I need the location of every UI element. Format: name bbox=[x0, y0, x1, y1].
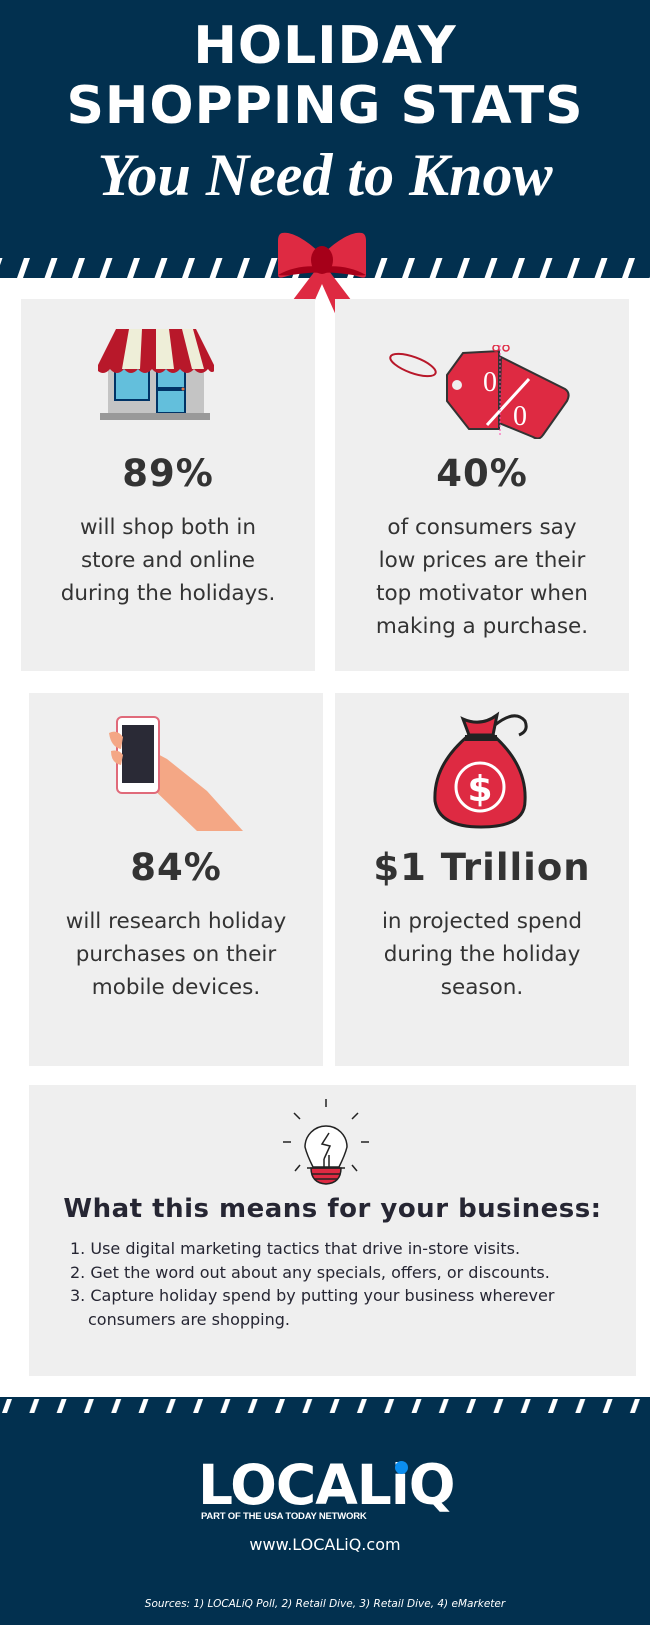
tagline: PART OF THE USA TODAY NETWORK bbox=[201, 1511, 367, 1522]
icon: phone in hand bbox=[109, 716, 243, 831]
text: in projected spend bbox=[382, 909, 582, 934]
stat: 89%: 89% bbox=[122, 452, 214, 495]
stat: $1 Trillion: $1 Trillion bbox=[373, 846, 591, 889]
list: 2. Get the word out about any specials, offers, or discounts. bbox=[70, 1262, 550, 1282]
list bbox=[70, 1239, 554, 1328]
subtitle: You Need to Know bbox=[97, 142, 553, 208]
text bbox=[382, 909, 582, 1000]
heading: What this means for your business: bbox=[63, 1194, 602, 1224]
text: of consumers say bbox=[387, 515, 577, 540]
text: season. bbox=[441, 975, 523, 1000]
text: top motivator when bbox=[376, 581, 588, 606]
text: will research holiday bbox=[66, 909, 286, 934]
sources: Sources: 1) LOCALiQ Poll, 2) Retail Dive, 3) Retail Dive, 4) eMarketer bbox=[145, 1598, 505, 1610]
icon: money bag bbox=[433, 712, 528, 828]
text: low prices are their bbox=[379, 548, 585, 573]
footer band bbox=[0, 1397, 650, 1625]
text: making a purchase. bbox=[376, 614, 588, 639]
footer stripe bbox=[2, 1399, 640, 1413]
text: store and online bbox=[81, 548, 255, 573]
text: will shop both in bbox=[80, 515, 256, 540]
icon: money bag: $ bbox=[467, 769, 493, 810]
text: during the holidays. bbox=[61, 581, 275, 606]
panel: mobile research bbox=[29, 693, 323, 1066]
text bbox=[376, 515, 588, 639]
text: during the holiday bbox=[384, 942, 580, 967]
icon: store bbox=[98, 329, 214, 420]
icon: price tag bbox=[389, 345, 570, 439]
icon: light bulb bbox=[283, 1099, 369, 1185]
text bbox=[66, 909, 286, 1000]
header band bbox=[0, 0, 650, 278]
panel: low prices bbox=[335, 299, 629, 671]
panel: in store and online bbox=[21, 299, 315, 671]
logo: LOCALiQ bbox=[198, 1453, 454, 1517]
title: SHOPPING STATS bbox=[66, 76, 584, 136]
panel: trillion spend bbox=[335, 693, 629, 1066]
title: HOLIDAY bbox=[193, 16, 457, 76]
title bbox=[66, 16, 584, 136]
list: 1. Use digital marketing tactics that drive in-store visits. bbox=[70, 1239, 520, 1258]
list: 3. Capture holiday spend by putting your business wherever bbox=[70, 1286, 554, 1305]
list: consumers are shopping. bbox=[88, 1310, 290, 1328]
icon: bow bbox=[278, 232, 366, 314]
text: mobile devices. bbox=[92, 975, 260, 1000]
top stripe bbox=[0, 258, 650, 278]
stat: 84%: 84% bbox=[130, 846, 222, 889]
url: www.LOCALiQ.com bbox=[249, 1535, 401, 1554]
icon: price tag: 0 bbox=[483, 367, 497, 398]
panel: what this means bbox=[29, 1085, 636, 1376]
text bbox=[61, 515, 275, 606]
text: purchases on their bbox=[76, 942, 276, 967]
icon: price tag: 0 bbox=[513, 401, 527, 432]
stat: 40%: 40% bbox=[436, 452, 528, 495]
